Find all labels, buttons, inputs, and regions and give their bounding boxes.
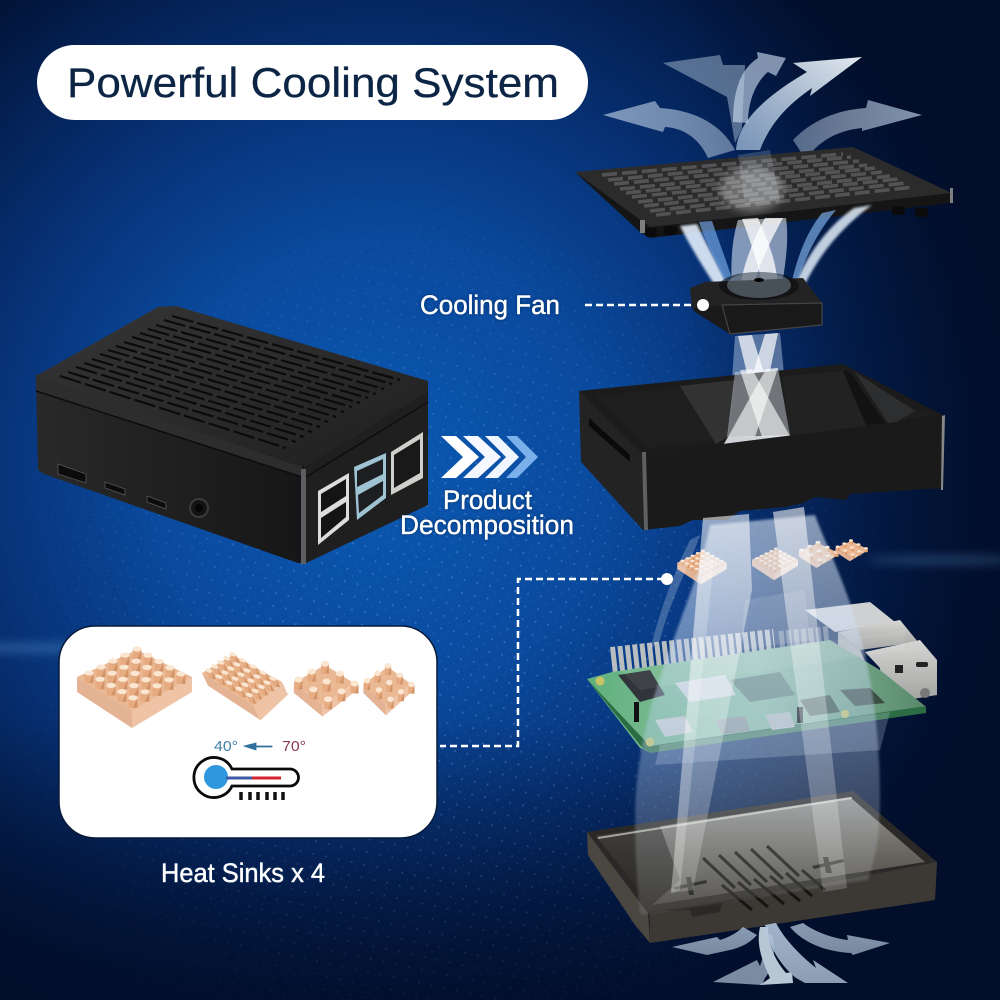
case front ports [58,464,208,517]
small heat sinks on board [677,539,868,585]
lid slots [602,154,914,215]
board chips [618,670,885,737]
airflow arrows below tray [672,923,890,985]
GPIO pins [612,647,775,665]
cooling fan [690,272,822,334]
assembled black case [36,306,428,564]
USB ports blue [354,453,386,520]
airflow beams between fan and case [728,333,790,437]
vented lid [575,147,953,238]
label: Product Decomposition: Product [443,485,532,515]
label: Product Decomposition: Decomposition [400,510,574,540]
case front face [36,378,306,563]
open case body [579,364,945,530]
label: Heat Sinks x 4: Heat Sinks x 4 [161,858,325,888]
USB and ethernet connectors [805,602,937,704]
icon: smallest copper heat sink [363,663,415,715]
leader line: heat sinks [440,573,673,746]
panel: heat sinks [59,626,437,838]
ethernet port [391,432,423,495]
case right face [304,388,428,564]
title text: Powerful Cooling System [67,59,559,106]
icon: small copper heat sink [294,661,359,716]
airflow beams between lid and fan [680,205,872,305]
case top vented face [36,306,428,466]
icon: medium copper heat sink [190,647,302,725]
lid feet [645,206,928,237]
bright left beam [671,514,752,893]
label: Cooling Fan: Cooling Fan [420,290,560,320]
USB ports white [318,473,349,545]
bright right beam [773,507,847,892]
temperature drop label: 70° [282,738,306,755]
bright beam inside case [727,368,790,437]
icon: large copper heat sink [77,646,192,728]
title pill [37,45,588,120]
case front wall [643,416,945,530]
tray vent slots [703,846,825,910]
PCB [587,640,926,752]
tray plus marks [673,857,844,895]
temperature drop label [214,738,306,755]
case left wall [579,391,643,530]
temperature drop label: 40° [214,738,238,755]
bottom tray [587,791,937,943]
icon: thermometer [194,758,299,800]
leader line: cooling fan [585,299,709,311]
arrow: product decomposition chevrons [441,436,538,478]
raspberry pi board [587,602,937,753]
label: Product Decomposition [400,485,574,540]
airflow arrows above lid [603,52,922,160]
airflow beam bell through board [598,507,905,915]
